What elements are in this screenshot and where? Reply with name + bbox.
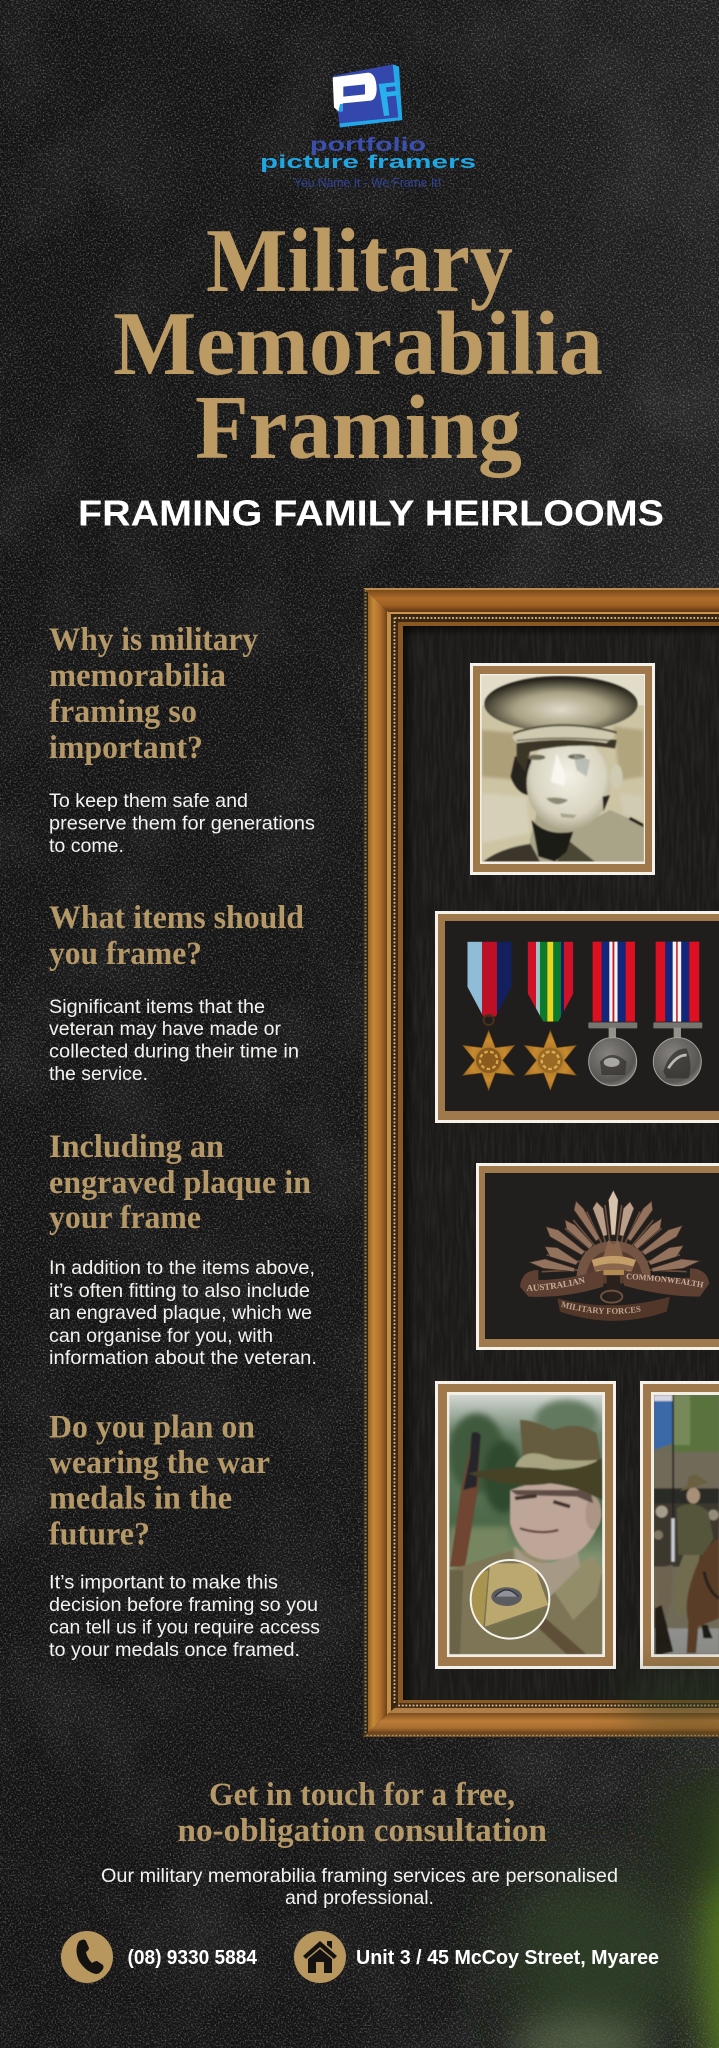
- heading: [49, 900, 304, 972]
- question block 3: [49, 1129, 317, 1369]
- medal 3: war medal: [588, 942, 637, 1086]
- lower scroll with lettering: [557, 1290, 670, 1321]
- answer text: an engraved plaque, which we: [49, 1302, 312, 1324]
- logo wordmark: portfolio: [310, 135, 426, 156]
- heading: engraved plaque in: [49, 1165, 311, 1201]
- title: [113, 210, 603, 478]
- answer text: In addition to the items above,: [49, 1257, 315, 1279]
- heading: your frame: [49, 1200, 201, 1236]
- answer text: can tell us if you require access: [49, 1616, 320, 1638]
- answer text: can organise for you, with: [49, 1325, 273, 1347]
- logo: portfolio picture framers: You Name It - We Frame It!: [294, 175, 441, 190]
- heading: [49, 1129, 311, 1236]
- subtitle: FRAMING FAMILY HEIRLOOMS: [78, 492, 664, 534]
- call to action text: and professional.: [285, 1887, 434, 1909]
- address contact: [294, 1931, 659, 1983]
- heading: framing so: [49, 694, 197, 730]
- rising sun badge: [520, 1190, 710, 1321]
- heading: Do you plan on: [49, 1410, 255, 1446]
- title: Military: [206, 210, 513, 311]
- medal 4: war medal: [653, 942, 702, 1086]
- address: Unit 3 / 45 McCoy Street, Myaree: [356, 1947, 659, 1969]
- heading: Including an: [49, 1129, 224, 1165]
- answer text: information about the veteran.: [49, 1347, 317, 1369]
- answer text: Significant items that the: [49, 996, 265, 1018]
- heading: What items should: [49, 900, 304, 936]
- four medals with ribbons: [463, 942, 702, 1090]
- phone number: (08) 9330 5884: [128, 1947, 258, 1969]
- heading: memorabilia: [49, 658, 226, 694]
- answer text: to come.: [49, 835, 124, 857]
- call to action heading: [178, 1777, 547, 1849]
- icon: phone: [61, 1931, 113, 1983]
- phone contact: [61, 1931, 258, 1983]
- answer text: to your medals once framed.: [49, 1639, 300, 1661]
- answer text: collected during their time in: [49, 1040, 299, 1062]
- green foliage glow bottom right: [500, 1670, 719, 2048]
- answer text: [49, 996, 299, 1085]
- answer text: It’s important to make this: [49, 1572, 278, 1594]
- answer text: it’s often fitting to also include: [49, 1280, 310, 1302]
- answer text: the service.: [49, 1063, 148, 1085]
- portrait of young soldier in peaked cap: [482, 675, 644, 862]
- mounted soldier photo: [435, 1381, 616, 1669]
- mounted parade photo: [640, 1381, 719, 1669]
- heading: you frame?: [49, 936, 202, 972]
- dome and crown: [576, 1240, 652, 1299]
- lower scroll with lettering: MILITARY FORCES: [560, 1301, 640, 1314]
- upper scroll with lettering: COMMONWEALTH: [626, 1274, 704, 1288]
- heading: future?: [49, 1516, 150, 1552]
- sun rays: [542, 1205, 687, 1272]
- answer text: To keep them safe and: [49, 790, 248, 812]
- heading: medals in the: [49, 1480, 232, 1516]
- medal 2: star with pacific ribbon: [524, 942, 576, 1090]
- mounted portrait photo: [470, 663, 655, 875]
- call to action heading: Get in touch for a free,: [209, 1777, 515, 1813]
- gold picture frame: [363, 588, 719, 1737]
- question block 1: [49, 622, 315, 857]
- logo: portfolio picture framers: picture framers: [260, 152, 476, 172]
- title: Memorabilia: [113, 293, 603, 394]
- icon: house: [294, 1931, 346, 1983]
- smiling soldier in slouch hat with inset badge: [448, 1395, 602, 1654]
- inset: rising sun badge on collar: [470, 1560, 550, 1640]
- heading: [49, 1410, 270, 1552]
- answer text: veteran may have made or: [49, 1018, 282, 1040]
- heading: important?: [49, 730, 203, 766]
- contact section: [101, 1777, 618, 1909]
- heading: Why is military: [49, 622, 258, 658]
- frame moulding: [363, 588, 719, 1737]
- logo mark: [333, 64, 402, 127]
- medal 1: star with blue, red, navy ribbon: [463, 942, 515, 1090]
- question block 2: [49, 900, 304, 1085]
- upper scroll with lettering: [520, 1268, 710, 1297]
- mounted rising sun badge panel: [476, 1163, 719, 1350]
- mounted medals panel: [435, 911, 719, 1123]
- answer text: [49, 1257, 317, 1369]
- answer text: [49, 790, 315, 857]
- rider with flag on horseback: [654, 1395, 719, 1654]
- call to action text: Our military memorabilia framing services are personalised: [101, 1865, 618, 1887]
- heading: [49, 622, 258, 766]
- title: Framing: [195, 377, 522, 478]
- call to action heading: no-obligation consultation: [178, 1813, 547, 1849]
- answer text: [49, 1572, 320, 1661]
- answer text: preserve them for generations: [49, 812, 315, 834]
- answer text: decision before framing so you: [49, 1594, 318, 1616]
- heading: wearing the war: [49, 1445, 270, 1481]
- logo: portfolio picture framers: [260, 64, 476, 190]
- question block 4: [49, 1410, 320, 1661]
- call to action text: [101, 1865, 618, 1909]
- upper scroll with lettering: AUSTRALIAN: [526, 1276, 584, 1291]
- black backing mat: [403, 626, 719, 1700]
